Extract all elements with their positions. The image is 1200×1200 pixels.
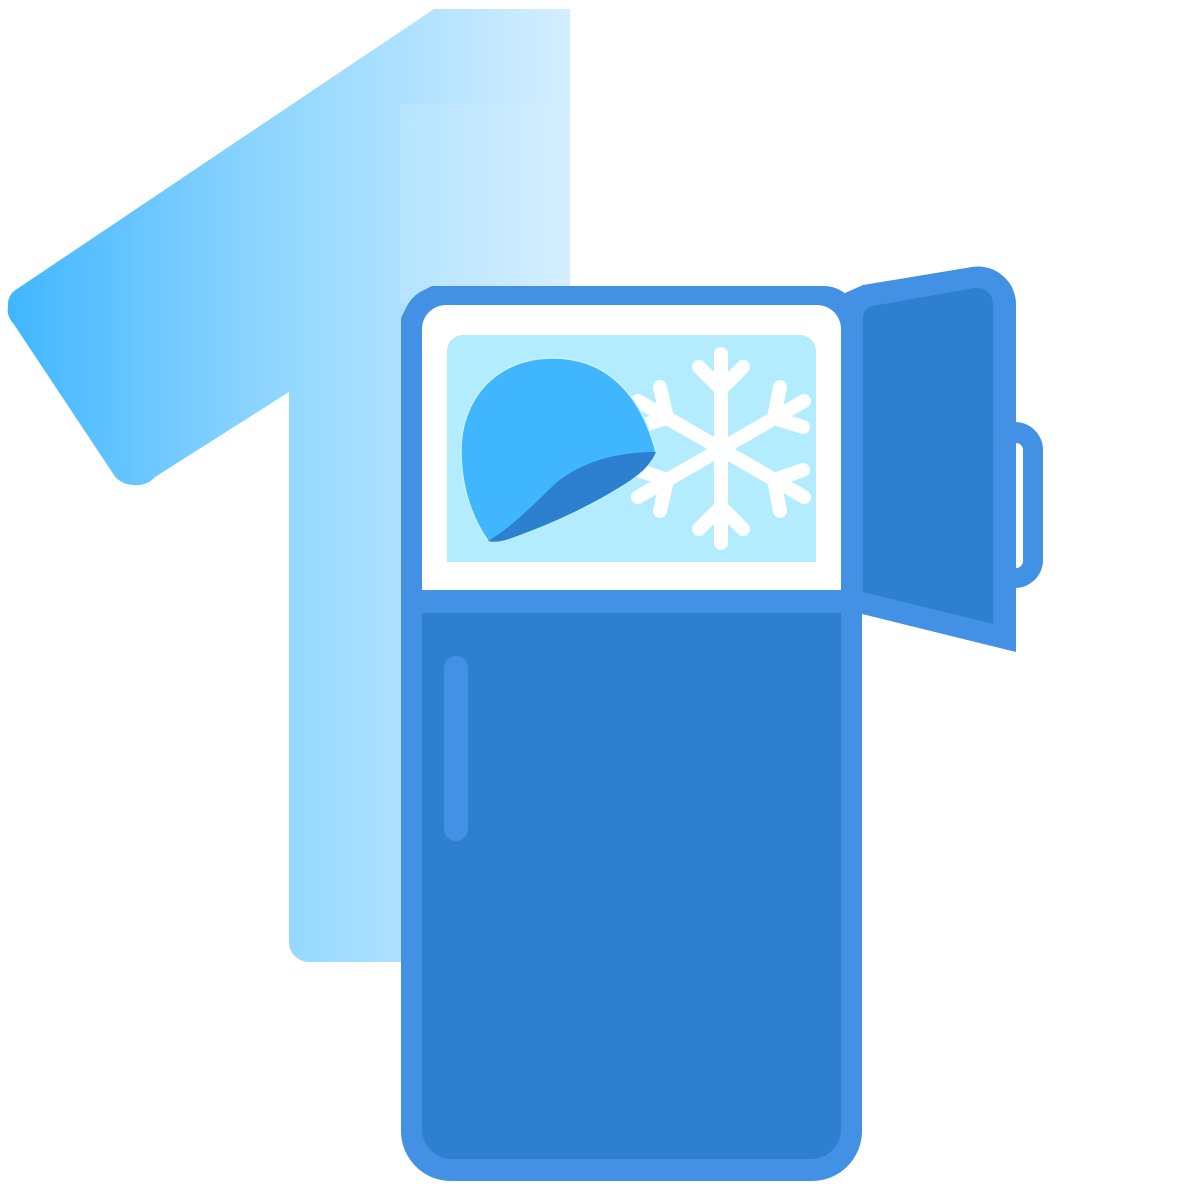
freezer compartment [422,305,841,590]
fridge open door [845,267,1043,652]
icon: snowflake [638,354,804,543]
freezer interior panel [447,335,816,562]
numeral 1 background [8,9,570,962]
lower door [422,613,841,1159]
door handle [444,656,468,841]
fridge body [401,286,862,1181]
refrigerator [401,267,1043,1181]
icon: swim cap [461,358,656,542]
